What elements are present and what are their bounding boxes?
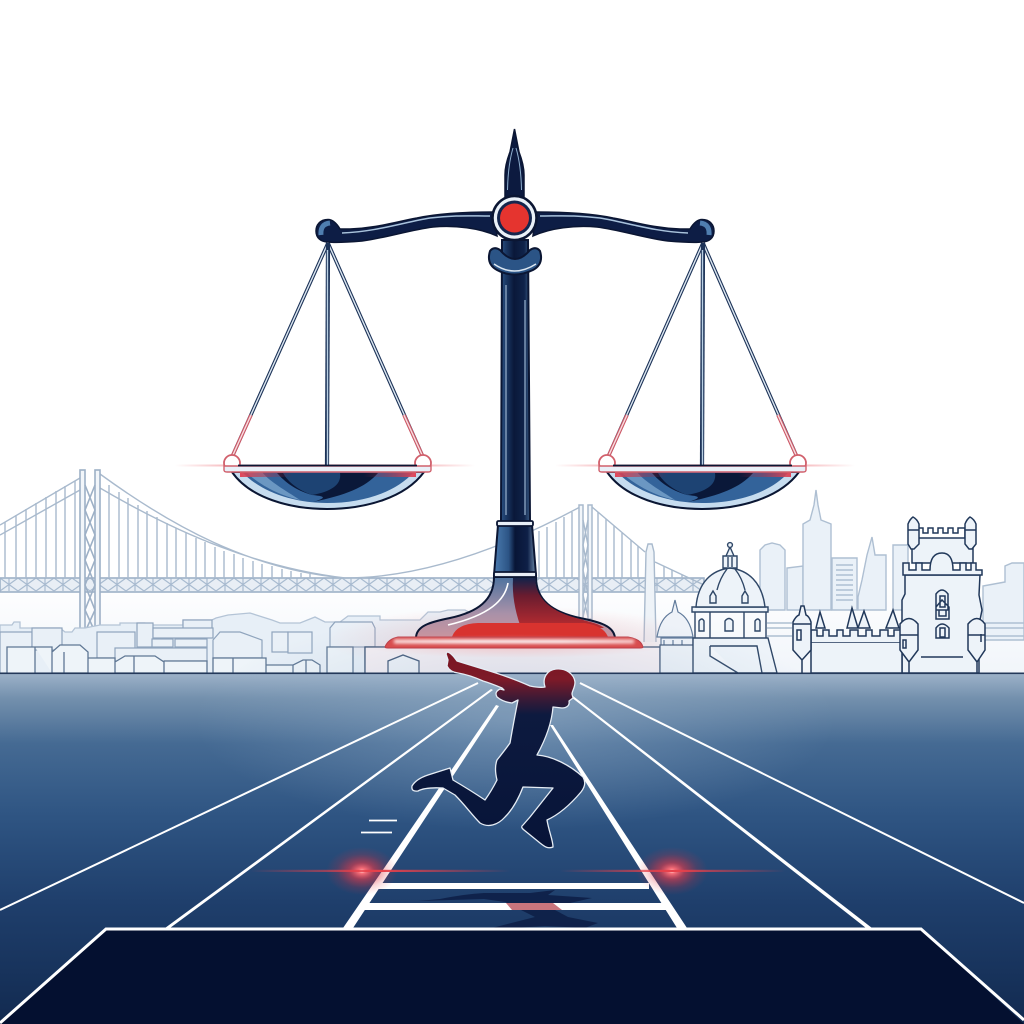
cathedral windows (699, 591, 760, 631)
domed cathedral (692, 543, 777, 673)
crossbars (362, 883, 668, 910)
apron border (0, 929, 1024, 1023)
far-right buildings (983, 563, 1024, 640)
cathedral drum (692, 607, 768, 638)
spire highlight (508, 148, 522, 190)
bridge hangers (5, 481, 682, 578)
track lane lines (0, 683, 1024, 928)
tower upper storey (912, 538, 973, 563)
right pan strings (608, 243, 797, 465)
right bridge tower (579, 505, 592, 619)
pink glow behind base (325, 606, 705, 674)
house row (7, 645, 387, 673)
outer lane lines (0, 683, 1024, 910)
horizontal wall bands (767, 623, 1024, 636)
centre corner turret (900, 618, 918, 673)
red hairline glows (175, 464, 855, 466)
spire (505, 129, 524, 198)
athlete reflection (418, 890, 598, 930)
left pan (224, 455, 431, 509)
athlete silhouette (412, 652, 585, 848)
cathedral dome (696, 568, 765, 607)
wall spires (816, 608, 899, 628)
track surface (0, 674, 1024, 1024)
balance scale (175, 129, 855, 658)
left flare (250, 847, 510, 895)
wall (811, 642, 902, 673)
middle lane lines (165, 689, 872, 928)
main battlements (903, 553, 982, 575)
suspension bridge (0, 470, 704, 642)
small domed church (657, 600, 695, 673)
track centre sheen (195, 610, 835, 830)
mid buildings (0, 620, 375, 673)
left corner turret (793, 606, 811, 673)
wall battlements (811, 630, 902, 642)
Belem tower (902, 517, 982, 673)
bridge cables (0, 474, 704, 585)
skyline: back towers (760, 490, 1024, 640)
horizon line (0, 672, 1024, 674)
stepped buildings (760, 537, 908, 610)
tower windows (921, 590, 963, 657)
sky background (0, 0, 1024, 674)
dark apron (0, 929, 1024, 1024)
collar (489, 248, 541, 274)
right corner turret (968, 618, 985, 673)
upper battlements (918, 528, 965, 538)
small house (388, 655, 419, 673)
column base flare (416, 577, 615, 638)
right pan (599, 455, 806, 509)
fortress wall with turrets (793, 606, 985, 673)
cathedral lantern (723, 547, 737, 568)
speed lines (361, 820, 397, 832)
bridge pylon (644, 544, 656, 642)
upper turrets (908, 517, 976, 549)
column highlight (506, 285, 525, 515)
pivot hub (492, 196, 536, 240)
skyscraper (803, 490, 831, 610)
left pan strings (232, 243, 423, 465)
plinth building (365, 647, 660, 674)
glowing base plate (364, 634, 664, 658)
red pivot button (500, 204, 529, 232)
office block (832, 558, 857, 610)
skyline: left front buildings (7, 645, 387, 673)
column rings (494, 521, 536, 577)
central lane lines (343, 705, 687, 928)
left bridge tower (80, 470, 100, 634)
column (501, 240, 530, 522)
tower body (902, 575, 982, 673)
skyline: left rooftops (0, 610, 520, 673)
back rooftops (0, 610, 520, 673)
red light flares on track (250, 847, 785, 895)
lower column (494, 525, 536, 575)
beam (316, 212, 714, 242)
collar highlight (494, 264, 536, 271)
right flare (560, 847, 785, 895)
bridge deck (0, 578, 704, 592)
cathedral platform (693, 638, 777, 673)
